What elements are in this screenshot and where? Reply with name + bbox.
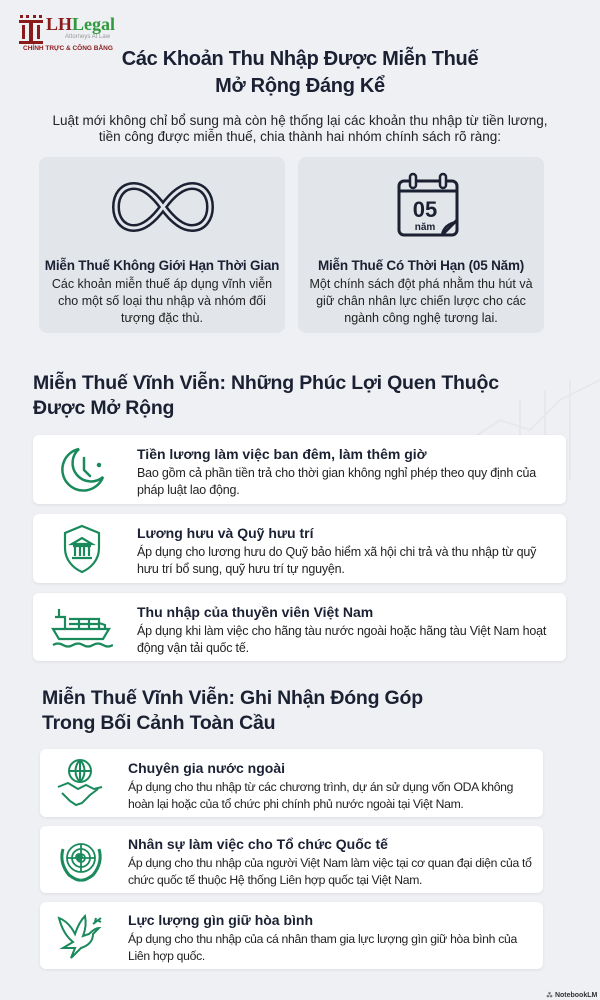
heading: section 2 bbox=[33, 372, 499, 419]
subtitle: Luật mới không chỉ bổ sung mà còn hệ thống lại các khoản thu nhập từ tiền lương, bbox=[52, 113, 548, 128]
footer: NotebookLM tag: ⁂ NotebookLM bbox=[546, 992, 597, 999]
card: seafarers bbox=[33, 593, 566, 661]
icon: dove bbox=[58, 914, 102, 959]
icon: calendar 05: năm bbox=[415, 222, 435, 233]
logo bbox=[19, 14, 115, 52]
card: international organization staff: Áp dụng cho thu nhập của người Việt Nam làm việc tại cơ quan đại diện của tổ chức quốc tế thuộc Hệ thống Liên hợp quốc tại Việt Nam. bbox=[128, 856, 532, 887]
heading: section 3: Trong Bối Cảnh Toàn Cầu bbox=[42, 712, 275, 734]
card: pension: Lương hưu và Quỹ hưu trí bbox=[137, 525, 313, 541]
card: night/overtime pay bbox=[33, 435, 566, 504]
icon: infinity bbox=[112, 182, 214, 232]
panel: 5-year exemption bbox=[298, 157, 544, 333]
heading: section 3 bbox=[42, 686, 423, 734]
panel: unlimited exemption: Các khoản miễn thuế áp dụng vĩnh viễn cho một số loại thu nhập và nhóm đối tượng đặc thù. bbox=[52, 277, 272, 325]
title: Mở Rộng Đáng Kể bbox=[215, 75, 385, 97]
title bbox=[122, 46, 479, 97]
panel: unlimited exemption: Miễn Thuế Không Giới Hạn Thời Gian bbox=[45, 258, 279, 273]
card: peacekeeping bbox=[40, 902, 543, 969]
logo: LHLegal bbox=[46, 14, 115, 34]
card: seafarers: Thu nhập của thuyền viên Việt Nam bbox=[137, 604, 373, 620]
icon: ship bbox=[51, 609, 113, 648]
icon: calendar 05: 05 bbox=[413, 197, 437, 222]
card: foreign experts: Chuyên gia nước ngoài bbox=[128, 760, 285, 776]
card: foreign experts bbox=[40, 749, 543, 817]
logo: CHÍNH TRỰC & CÔNG BẰNG bbox=[23, 45, 113, 52]
heading: section 2: Miễn Thuế Vĩnh Viễn: Những Phúc Lợi Quen Thuộc bbox=[33, 372, 499, 394]
logo: Attorneys At Law bbox=[65, 34, 110, 40]
card: foreign experts: Áp dụng cho thu nhập từ các chương trình, dự án sử dụng vốn ODA không hoàn lại hoặc của tổ chức phi chính phủ nước ngoài tại Việt Nam. bbox=[128, 780, 513, 811]
icon: moon clock bbox=[61, 448, 104, 492]
card: pension: Áp dụng cho lương hưu do Quỹ bảo hiểm xã hội chi trả và thu nhập từ quỹ hưu trí bổ sung, quỹ hưu trí tự nguyện. bbox=[137, 545, 536, 576]
card: night/overtime pay: Bao gồm cả phần tiền trả cho thời gian không nghỉ phép theo quy định của pháp luật lao động. bbox=[137, 466, 536, 497]
card: night/overtime pay: Tiền lương làm việc ban đêm, làm thêm giờ bbox=[137, 446, 427, 462]
icon: shield bank bbox=[64, 524, 100, 574]
card: peacekeeping: Lực lượng gìn giữ hòa bình bbox=[128, 912, 313, 928]
subtitle bbox=[52, 113, 548, 144]
icon: UN emblem bbox=[60, 843, 102, 882]
panel: 5-year exemption: Miễn Thuế Có Thời Hạn (05 Năm) bbox=[318, 258, 524, 273]
card: pension bbox=[33, 514, 566, 583]
subtitle: tiền công được miễn thuế, chia thành hai nhóm chính sách rõ ràng: bbox=[99, 129, 501, 144]
title: Các Khoản Thu Nhập Được Miễn Thuế bbox=[122, 48, 478, 70]
card: peacekeeping: Áp dụng cho thu nhập của cá nhân tham gia lực lượng gìn giữ hòa bình của Liên hợp quốc. bbox=[128, 932, 517, 963]
panel: 5-year exemption: Một chính sách đột phá nhằm thu hút và giữ chân nhân lực chiến lược cho các ngành công nghệ tương lai. bbox=[309, 277, 533, 325]
heading: section 3: Miễn Thuế Vĩnh Viễn: Ghi Nhận Đóng Góp bbox=[42, 687, 423, 709]
heading: section 2: Được Mở Rộng bbox=[33, 397, 174, 419]
icon: calendar 05 bbox=[398, 172, 458, 236]
panel: unlimited exemption bbox=[39, 157, 285, 333]
card: seafarers: Áp dụng khi làm việc cho hãng tàu nước ngoài hoặc hãng tàu Việt Nam hoạt động vận tải quốc tế. bbox=[137, 624, 546, 655]
card: international organization staff: Nhân sự làm việc cho Tổ chức Quốc tế bbox=[128, 836, 388, 852]
card: international organization staff bbox=[40, 826, 543, 893]
icon: globe handshake bbox=[58, 759, 102, 806]
